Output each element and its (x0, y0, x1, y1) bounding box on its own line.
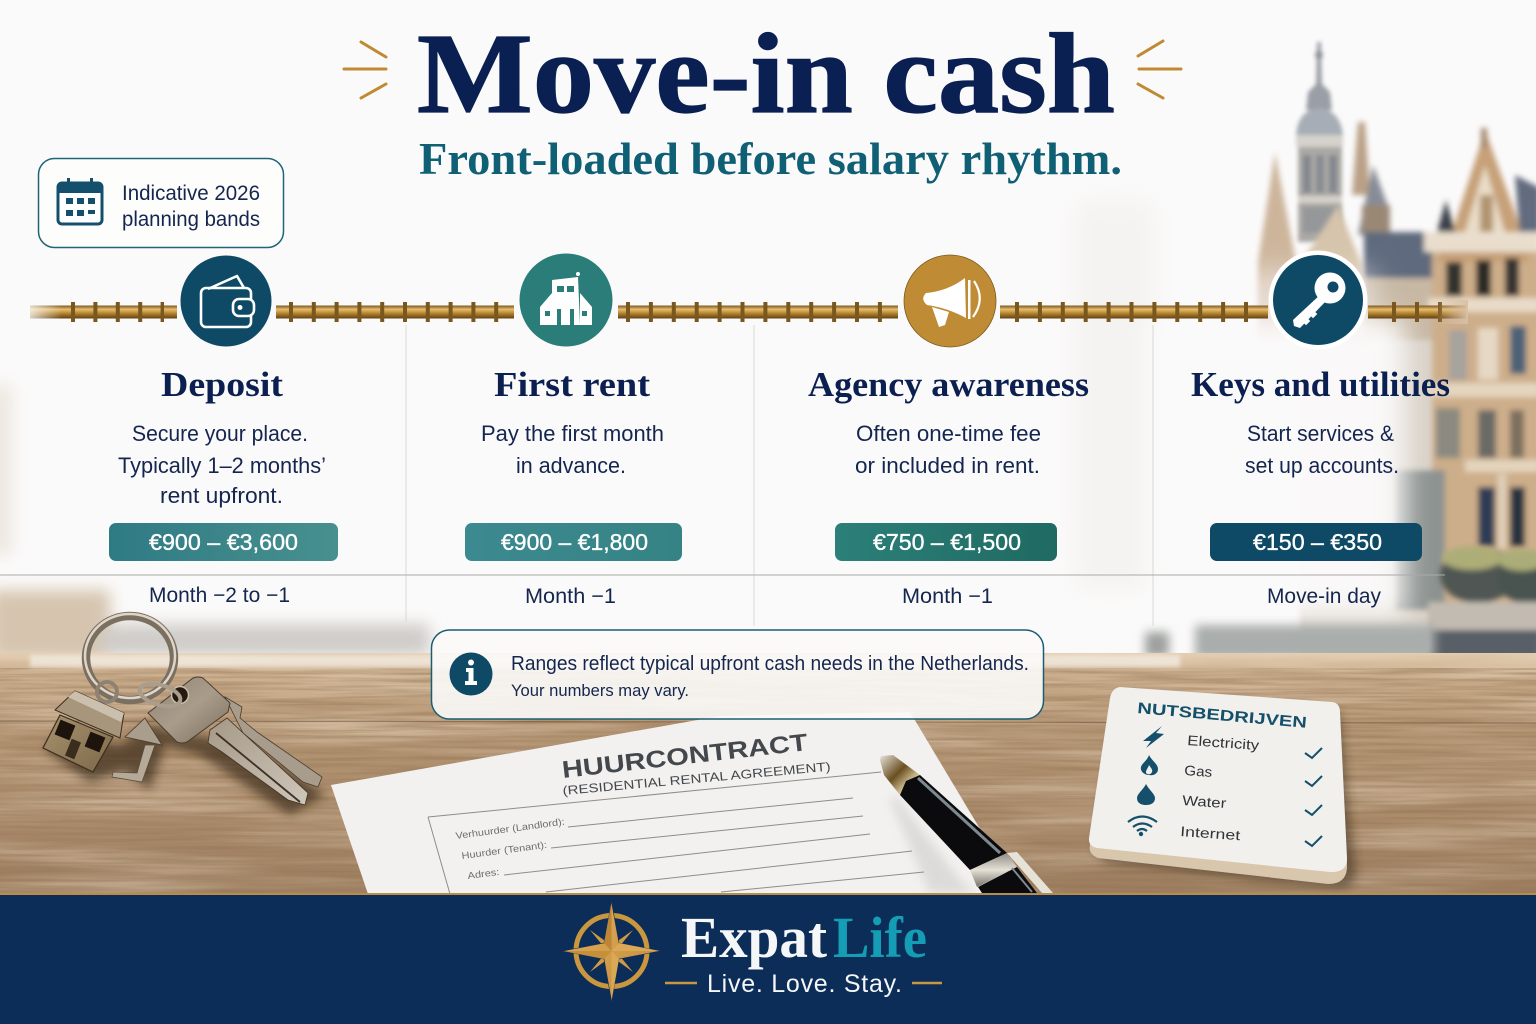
description (1245, 421, 1399, 478)
column dividers (406, 325, 1153, 626)
note main line: Ranges reflect typical upfront cash needs in the Netherlands. (511, 652, 1029, 675)
cost band pill: €150 – €350 (1253, 529, 1382, 555)
description: Secure your place. (132, 421, 308, 446)
key shadow (45, 725, 325, 815)
description: Pay the first month (481, 421, 664, 446)
cost band pill: €750 – €1,500 (873, 529, 1021, 555)
logo: wordmark: Life (833, 905, 927, 970)
title accent: right rays (1138, 41, 1181, 98)
wood table (0, 653, 1536, 894)
timeline rope (20, 300, 1468, 324)
heading: First rent (494, 365, 650, 404)
small key charm (112, 718, 162, 782)
contract subheading: (RESIDENTIAL RENTAL AGREEMENT) (562, 760, 831, 798)
icon: calendar (58, 178, 102, 224)
step 4: keys and utilities (1191, 250, 1450, 608)
photo: pen (880, 755, 1053, 893)
cost band pill (1210, 523, 1422, 561)
description (481, 421, 664, 478)
heading: Agency awareness (808, 365, 1089, 404)
cost band pill (465, 523, 682, 561)
icon: key (1268, 250, 1368, 350)
description: rent upfront. (160, 483, 283, 508)
logo: tagline: Live. Love. Stay. (707, 970, 902, 998)
description: Typically 1–2 months’ (118, 453, 326, 478)
background: white veil over buildings (1150, 270, 1405, 618)
cost band pill: €900 – €3,600 (149, 529, 298, 555)
row: internet (1128, 816, 1322, 846)
title accent: left rays (344, 42, 386, 98)
logo: compass (563, 902, 660, 1001)
footer band (0, 893, 1536, 1024)
connecting link (137, 680, 183, 710)
tenant field: Huurder (Tenant): (461, 840, 548, 862)
cost band pill (109, 523, 338, 561)
description: in advance. (516, 453, 626, 478)
back key (225, 697, 322, 787)
heading: Keys and utilities (1191, 365, 1450, 404)
photo: rental contract paper (331, 712, 1019, 894)
icon: info (450, 652, 492, 696)
bushes and ledge (1428, 546, 1536, 658)
title: Move-in cash (417, 10, 1115, 137)
description: Often one-time fee (856, 421, 1041, 446)
front key (148, 677, 308, 805)
planning bands badge (38, 158, 284, 248)
row: water (1137, 784, 1322, 815)
row: electricity (1143, 726, 1322, 758)
cost band pill (835, 523, 1057, 561)
timing: Month −1 (902, 585, 993, 608)
key ring (85, 614, 175, 700)
description (118, 421, 326, 508)
subtitle: Front-loaded before salary rhythm. (419, 133, 1122, 184)
heading: Deposit (161, 365, 283, 404)
contract heading: HUURCONTRACT (561, 729, 809, 784)
background: pale window column (1075, 200, 1155, 590)
row: gas (1141, 755, 1322, 786)
description (855, 421, 1041, 478)
note second line: Your numbers may vary. (511, 681, 689, 700)
badge text (122, 181, 260, 231)
icon: megaphone (904, 255, 996, 347)
step 3: agency awareness (808, 255, 1089, 608)
background: blurred Dutch buildings (1258, 42, 1536, 660)
background: water strip behind table (1145, 625, 1435, 659)
badge text: Indicative 2026 (122, 181, 260, 205)
address field: Adres: (467, 867, 500, 882)
small house charm (43, 682, 124, 772)
badge text: planning bands (122, 207, 260, 231)
cost band pill: €900 – €1,800 (501, 529, 648, 555)
row: water: Water (1182, 792, 1227, 811)
row: gas: Gas (1184, 762, 1213, 780)
step 2: first rent (465, 254, 682, 608)
note callout (432, 630, 1044, 719)
timing: Month −2 to −1 (149, 584, 290, 607)
contract form lines (428, 772, 924, 894)
timing row rule (0, 574, 1445, 576)
logo: wordmark (681, 905, 927, 970)
landlord field: Verhuurder (Landlord): (455, 817, 565, 842)
tower (1296, 42, 1343, 242)
background: left window blur (0, 385, 430, 660)
row: internet: Internet (1180, 823, 1241, 843)
coaster title: NUTSBEDRIJVEN (1137, 700, 1307, 732)
photo: keychain and keys (43, 614, 325, 815)
step 1: deposit (109, 256, 338, 607)
timing: Month −1 (525, 585, 616, 608)
description: or included in rent. (855, 453, 1040, 478)
photo: utilities coaster (1089, 687, 1356, 888)
timing: Move-in day (1267, 585, 1381, 608)
row: electricity: Electricity (1187, 732, 1260, 753)
icon: wallet (180, 256, 272, 346)
icon: apartment building (520, 254, 612, 346)
description: Start services & (1247, 421, 1394, 446)
logo: wordmark: Expat (681, 905, 828, 970)
description: set up accounts. (1245, 453, 1399, 478)
